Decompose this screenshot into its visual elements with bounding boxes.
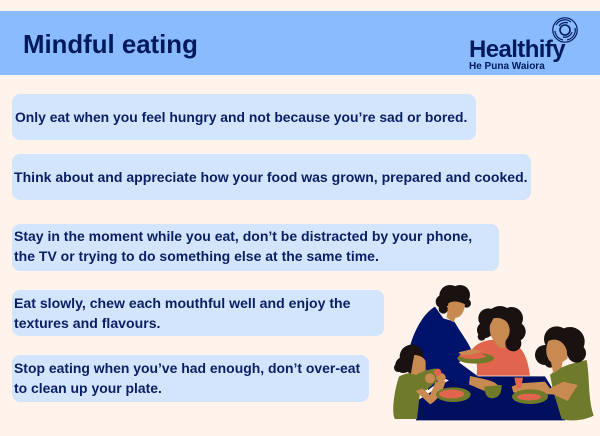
tip 4 text: Eat slowly, chew each mouthful well and enjoy the [14, 295, 350, 311]
panel: tip 4 [12, 290, 384, 336]
table [416, 376, 565, 420]
woman in coral top [472, 306, 530, 376]
child [393, 345, 446, 419]
tip 2 text: Think about and appreciate how your food was grown, prepared and cooked. [14, 169, 528, 185]
logo: Healthify He Puna Waiora [469, 17, 578, 72]
panel: tip 2 [12, 154, 531, 200]
tip 4 text [14, 295, 350, 331]
tip 5 text [14, 360, 360, 396]
tip 3 text [14, 228, 472, 264]
icon: concentric circle logo mark [552, 17, 578, 43]
panel: tip 5 [12, 355, 369, 402]
tip 3 text: the TV or trying to do something else at the same time. [14, 248, 379, 264]
tip 5 text: to clean up your plate. [14, 380, 162, 396]
bowl on table [484, 385, 502, 398]
header band [0, 11, 600, 75]
adult standing [409, 285, 502, 394]
plate on table left [436, 387, 471, 402]
logo wordmark: Healthify [469, 36, 565, 63]
tip 1 text: Only eat when you feel hungry and not because you’re sad or bored. [15, 109, 467, 125]
panel: tip 3 [12, 224, 499, 271]
title: Mindful eating [23, 31, 198, 59]
illustration: family eating at a table [393, 285, 594, 420]
tip 4 text: textures and flavours. [14, 315, 160, 331]
plate held by adult [457, 349, 494, 364]
plate on table right [512, 389, 548, 404]
tip 5 text: Stop eating when you’ve had enough, don’t over-eat [14, 360, 360, 376]
woman in green top [512, 326, 594, 420]
panel: tip 1 [12, 94, 476, 140]
logo tagline: He Puna Waiora [469, 61, 545, 72]
tip 3 text: Stay in the moment while you eat, don’t be distracted by your phone, [14, 228, 472, 244]
